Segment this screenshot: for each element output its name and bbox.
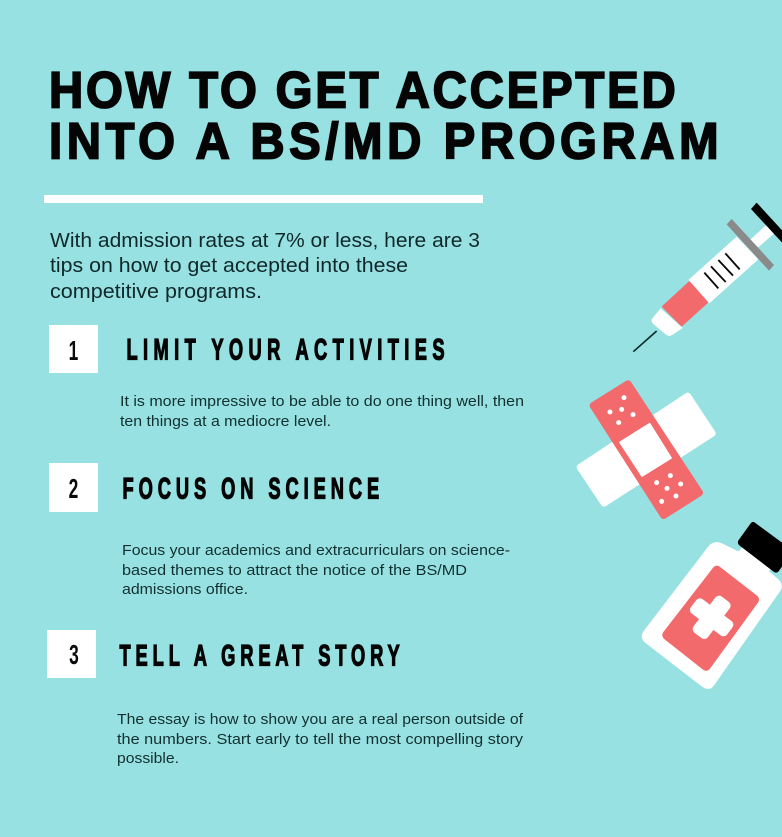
intro text: competitive programs. (50, 280, 262, 303)
title underline (44, 195, 483, 203)
tip 2 body text (122, 542, 510, 598)
title: HOW TO GET ACCEPTED (49, 62, 676, 119)
icon: syringe (633, 203, 782, 352)
tip 1 body text (120, 393, 524, 430)
title (49, 62, 719, 170)
tip 1 body text: ten things at a mediocre level. (120, 413, 331, 430)
icon: bandage (580, 384, 712, 515)
tip 1 number box (49, 325, 98, 373)
tip 2 (49, 463, 510, 598)
tip 2 number box: 2 (69, 473, 78, 504)
intro text: With admission rates at 7% or less, here are 3 (50, 229, 480, 252)
tip 3 (47, 630, 524, 767)
tip 2 heading: FOCUS ON SCIENCE (122, 473, 379, 506)
tip 2 body text: Focus your academics and extracurriculars on science- (122, 542, 510, 559)
tip 2 number box (49, 463, 98, 512)
tip 3 body text: the numbers. Start early to tell the most compelling story (117, 731, 524, 748)
tip 3 number box (47, 630, 96, 678)
tip 3 body text: possible. (117, 750, 179, 767)
tip 1 number box: 1 (69, 335, 78, 366)
tip 3 body text (117, 711, 524, 767)
tip 3 number box: 3 (69, 639, 79, 670)
tip 3 body text: The essay is how to show you are a real person outside of (117, 711, 524, 728)
title: INTO A BS/MD PROGRAM (49, 113, 719, 170)
tip 1 body text: It is more impressive to be able to do one thing well, then (120, 393, 524, 410)
tip 2 body text: admissions office. (122, 581, 248, 598)
tip 1 (49, 325, 524, 430)
icon: medicine bottle (642, 522, 782, 689)
tip 2 body text: based themes to attract the notice of the BS/MD (122, 562, 467, 579)
intro text (50, 229, 480, 303)
intro text: tips on how to get accepted into these (50, 254, 408, 277)
tip 1 heading: LIMIT YOUR ACTIVITIES (126, 334, 445, 367)
tip 3 heading: TELL A GREAT STORY (120, 640, 400, 673)
